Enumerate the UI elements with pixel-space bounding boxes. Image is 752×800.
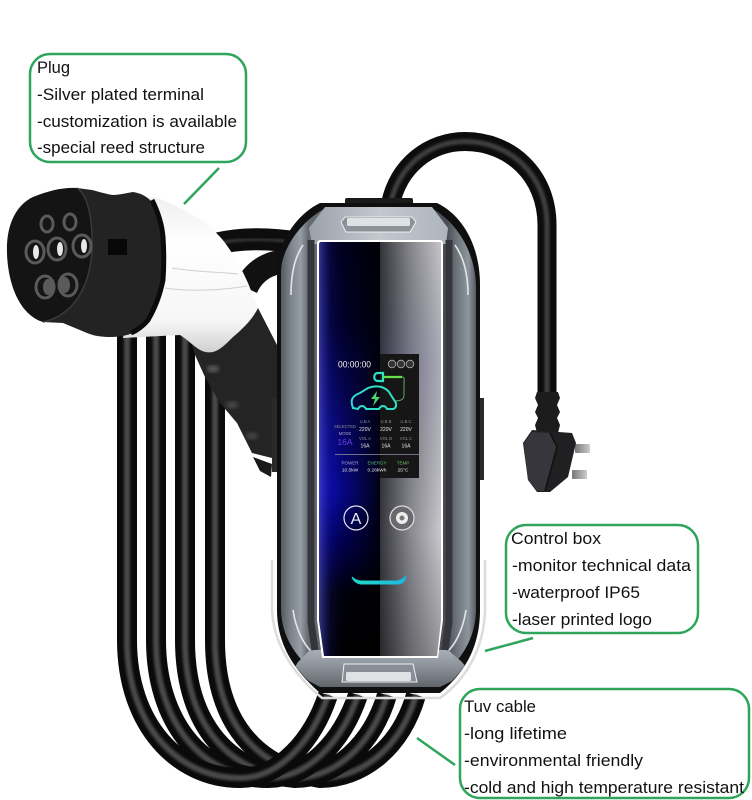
callout text: Tuv cable — [464, 697, 536, 716]
voltage and current table: 16A — [402, 444, 411, 450]
voltage and current table: 220V — [359, 427, 371, 433]
car glyph — [352, 386, 396, 409]
voltage and current table: 16A — [361, 444, 370, 450]
voltage and current table: VOL B — [380, 436, 392, 441]
power readouts: TEMP — [397, 460, 409, 466]
power cord with wall plug — [390, 142, 590, 492]
button: timer — [390, 506, 414, 530]
cable strain relief — [192, 308, 277, 477]
status icons — [388, 360, 414, 368]
callout: control box — [506, 525, 698, 633]
leader line: control box — [485, 638, 533, 651]
power readouts: 25°C — [398, 468, 409, 474]
callout text — [511, 529, 692, 629]
callout text: -cold and high temperature resistant — [464, 778, 744, 797]
top cap — [345, 198, 413, 205]
callout: plug — [30, 54, 246, 162]
callout box — [30, 54, 246, 162]
callout text: -Silver plated terminal — [37, 85, 204, 104]
voltage and current table — [359, 419, 412, 450]
power readouts: ENERGY — [367, 460, 387, 466]
callout: cable — [460, 689, 749, 798]
button: A: A — [351, 511, 362, 528]
LCD display — [334, 354, 419, 478]
bottom clip — [342, 664, 417, 682]
power readouts: 10.5kW — [342, 468, 359, 474]
side tabs — [272, 398, 484, 480]
selected mode readout — [334, 424, 356, 447]
callout text: -environmental friendly — [464, 751, 644, 770]
callout text — [464, 697, 744, 797]
bottom silver trim — [292, 650, 470, 687]
callout text: -long lifetime — [464, 724, 567, 743]
box body — [277, 203, 480, 693]
voltage and current table: VOL C — [400, 436, 412, 441]
box halo — [272, 560, 485, 698]
screen left half — [319, 242, 380, 656]
voltage and current table: U.B B — [381, 419, 392, 424]
EV connector plug — [7, 188, 258, 352]
frame lines — [317, 240, 443, 658]
voltage and current table: 220V — [380, 427, 392, 433]
button: A — [344, 506, 368, 530]
callout text: -customization is available — [37, 112, 237, 131]
connector face — [7, 188, 92, 322]
power readouts: POWER — [341, 460, 359, 466]
power readouts: 0.26kWh — [368, 468, 387, 474]
wall plug — [523, 392, 590, 492]
dark frame bands — [311, 240, 449, 650]
teal light bar — [352, 576, 406, 584]
leader line: plug — [184, 168, 219, 204]
selected mode readout: SELECTED — [334, 424, 356, 429]
connector latch slot — [108, 239, 127, 255]
screen right half — [380, 242, 441, 656]
callout box — [506, 525, 698, 633]
power readouts — [341, 460, 409, 474]
voltage and current table: U.B C — [400, 419, 412, 424]
callout text — [37, 58, 237, 157]
callout text: -waterproof IP65 — [512, 583, 640, 602]
side highlights — [291, 245, 468, 652]
connector pins — [26, 214, 91, 298]
leader line: cable — [417, 738, 455, 765]
callout text: -laser printed logo — [512, 610, 652, 629]
voltage and current table: 16A — [382, 444, 391, 450]
voltage and current table: 220V — [400, 427, 412, 433]
callout box — [460, 689, 749, 798]
callout text: -special reed structure — [37, 138, 205, 157]
top silver trim — [309, 207, 448, 244]
connector black body — [33, 188, 166, 337]
voltage and current table: VOL A — [359, 436, 371, 441]
selected mode readout: 16A — [337, 437, 353, 447]
voltage and current table: U.B A — [360, 419, 371, 424]
selected mode readout: MODE — [339, 431, 351, 436]
plug glyph — [374, 373, 404, 401]
control box — [272, 198, 485, 698]
timer: 00:00:00 — [338, 360, 371, 370]
callout text: Plug — [37, 58, 70, 77]
bolt glyph — [371, 391, 380, 406]
four loops of cable — [127, 239, 416, 778]
connector white housing — [123, 197, 258, 352]
top clip — [341, 217, 416, 232]
callout text: -monitor technical data — [512, 556, 692, 575]
callout text: Control box — [511, 529, 602, 548]
